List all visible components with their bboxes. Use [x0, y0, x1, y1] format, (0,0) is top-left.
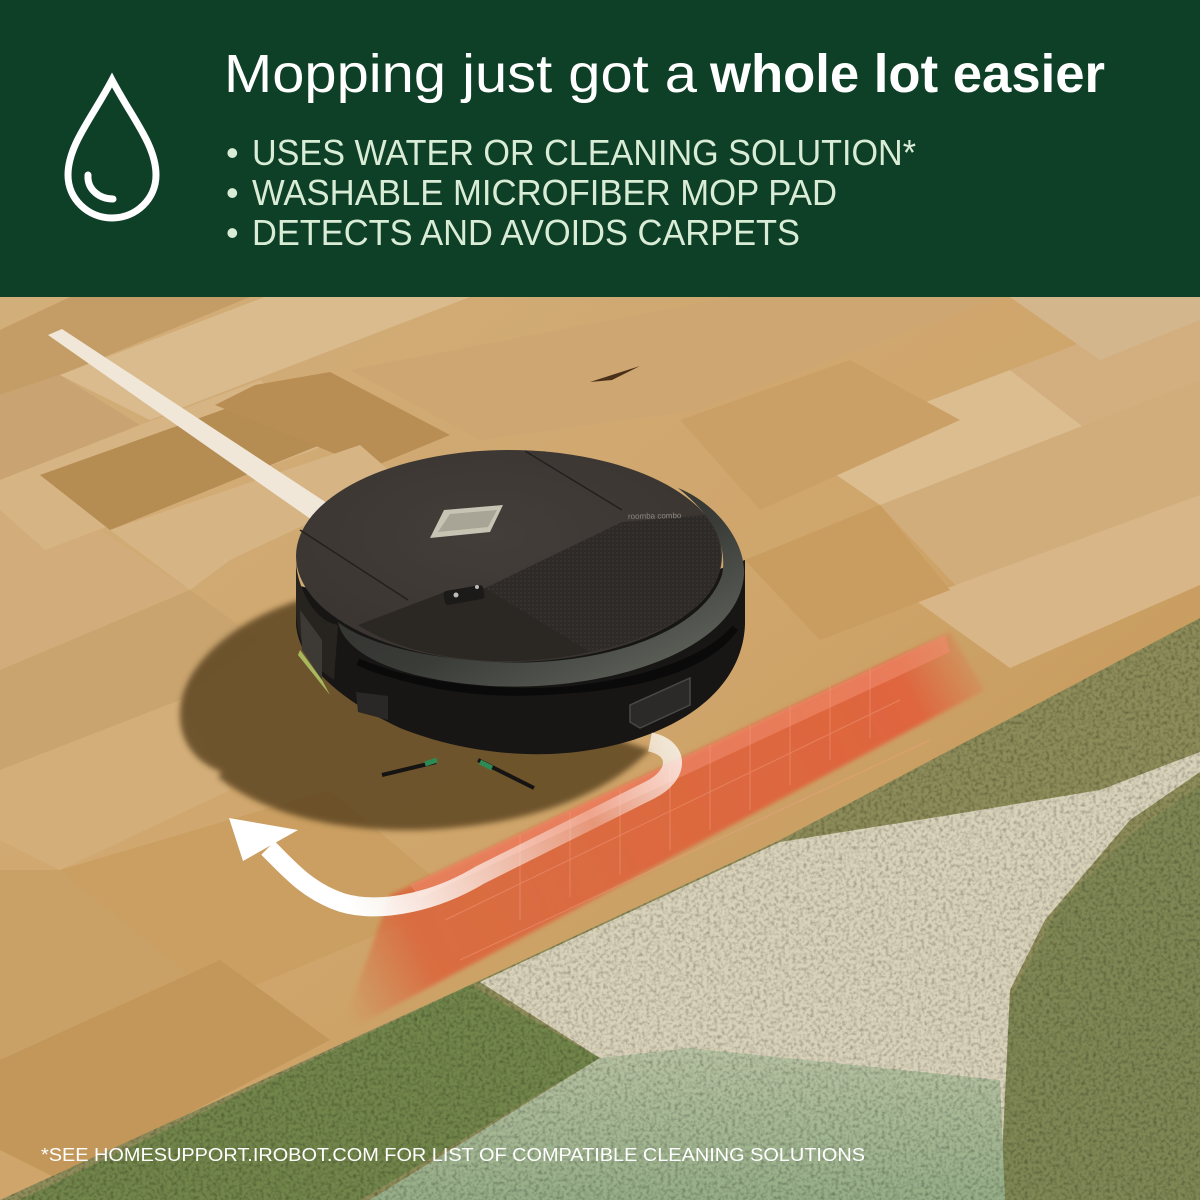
title: whole lot easier — [709, 44, 1105, 104]
bullet list: • — [226, 212, 239, 253]
rug — [0, 618, 1200, 1200]
rug: lower left green shape — [20, 985, 600, 1200]
wood floor — [0, 290, 1200, 1200]
robot: lower body — [296, 560, 745, 754]
robot: left bumper — [296, 560, 338, 680]
robot vacuum — [296, 450, 745, 788]
icon: water drop — [68, 80, 156, 218]
bullet list: DETECTS AND AVOIDS CARPETS — [252, 212, 800, 253]
rug: right green shape — [1000, 785, 1200, 1200]
rug: cream shape — [370, 752, 1200, 1200]
bullet list — [226, 132, 916, 253]
header band — [0, 0, 1200, 297]
turn arrow — [229, 742, 672, 907]
robot: side brushes — [382, 760, 534, 788]
robot: black front slot — [358, 628, 735, 692]
footnote: *SEE HOMESUPPORT.IROBOT.COM FOR LIST OF COMPATIBLE CLEANING SOLUTIONS — [41, 1145, 865, 1165]
robot: lid seams — [300, 451, 622, 600]
robot: fabric panel — [485, 515, 721, 652]
robot: sensors — [356, 692, 388, 720]
robot: top lid — [296, 450, 722, 662]
bullet list: USES WATER OR CLEANING SOLUTION* — [252, 132, 916, 173]
bullet list: WASHABLE MICROFIBER MOP PAD — [252, 172, 837, 213]
red boundary band — [340, 632, 985, 1035]
title — [224, 44, 1105, 104]
robot shadow — [180, 600, 650, 830]
robot: display window — [430, 505, 503, 538]
robot: dark front panel — [358, 588, 590, 661]
rug: olive top section — [0, 618, 1200, 1200]
bullet list: • — [226, 172, 239, 213]
robot: brand label: roomba combo — [628, 511, 682, 521]
rug: pale sage shape — [370, 1048, 1005, 1200]
title: Mopping just got a — [224, 44, 698, 104]
bullet list: • — [226, 132, 239, 173]
robot: buttons — [443, 585, 485, 605]
path line behind robot — [48, 329, 327, 520]
robot: green rim — [338, 488, 744, 687]
